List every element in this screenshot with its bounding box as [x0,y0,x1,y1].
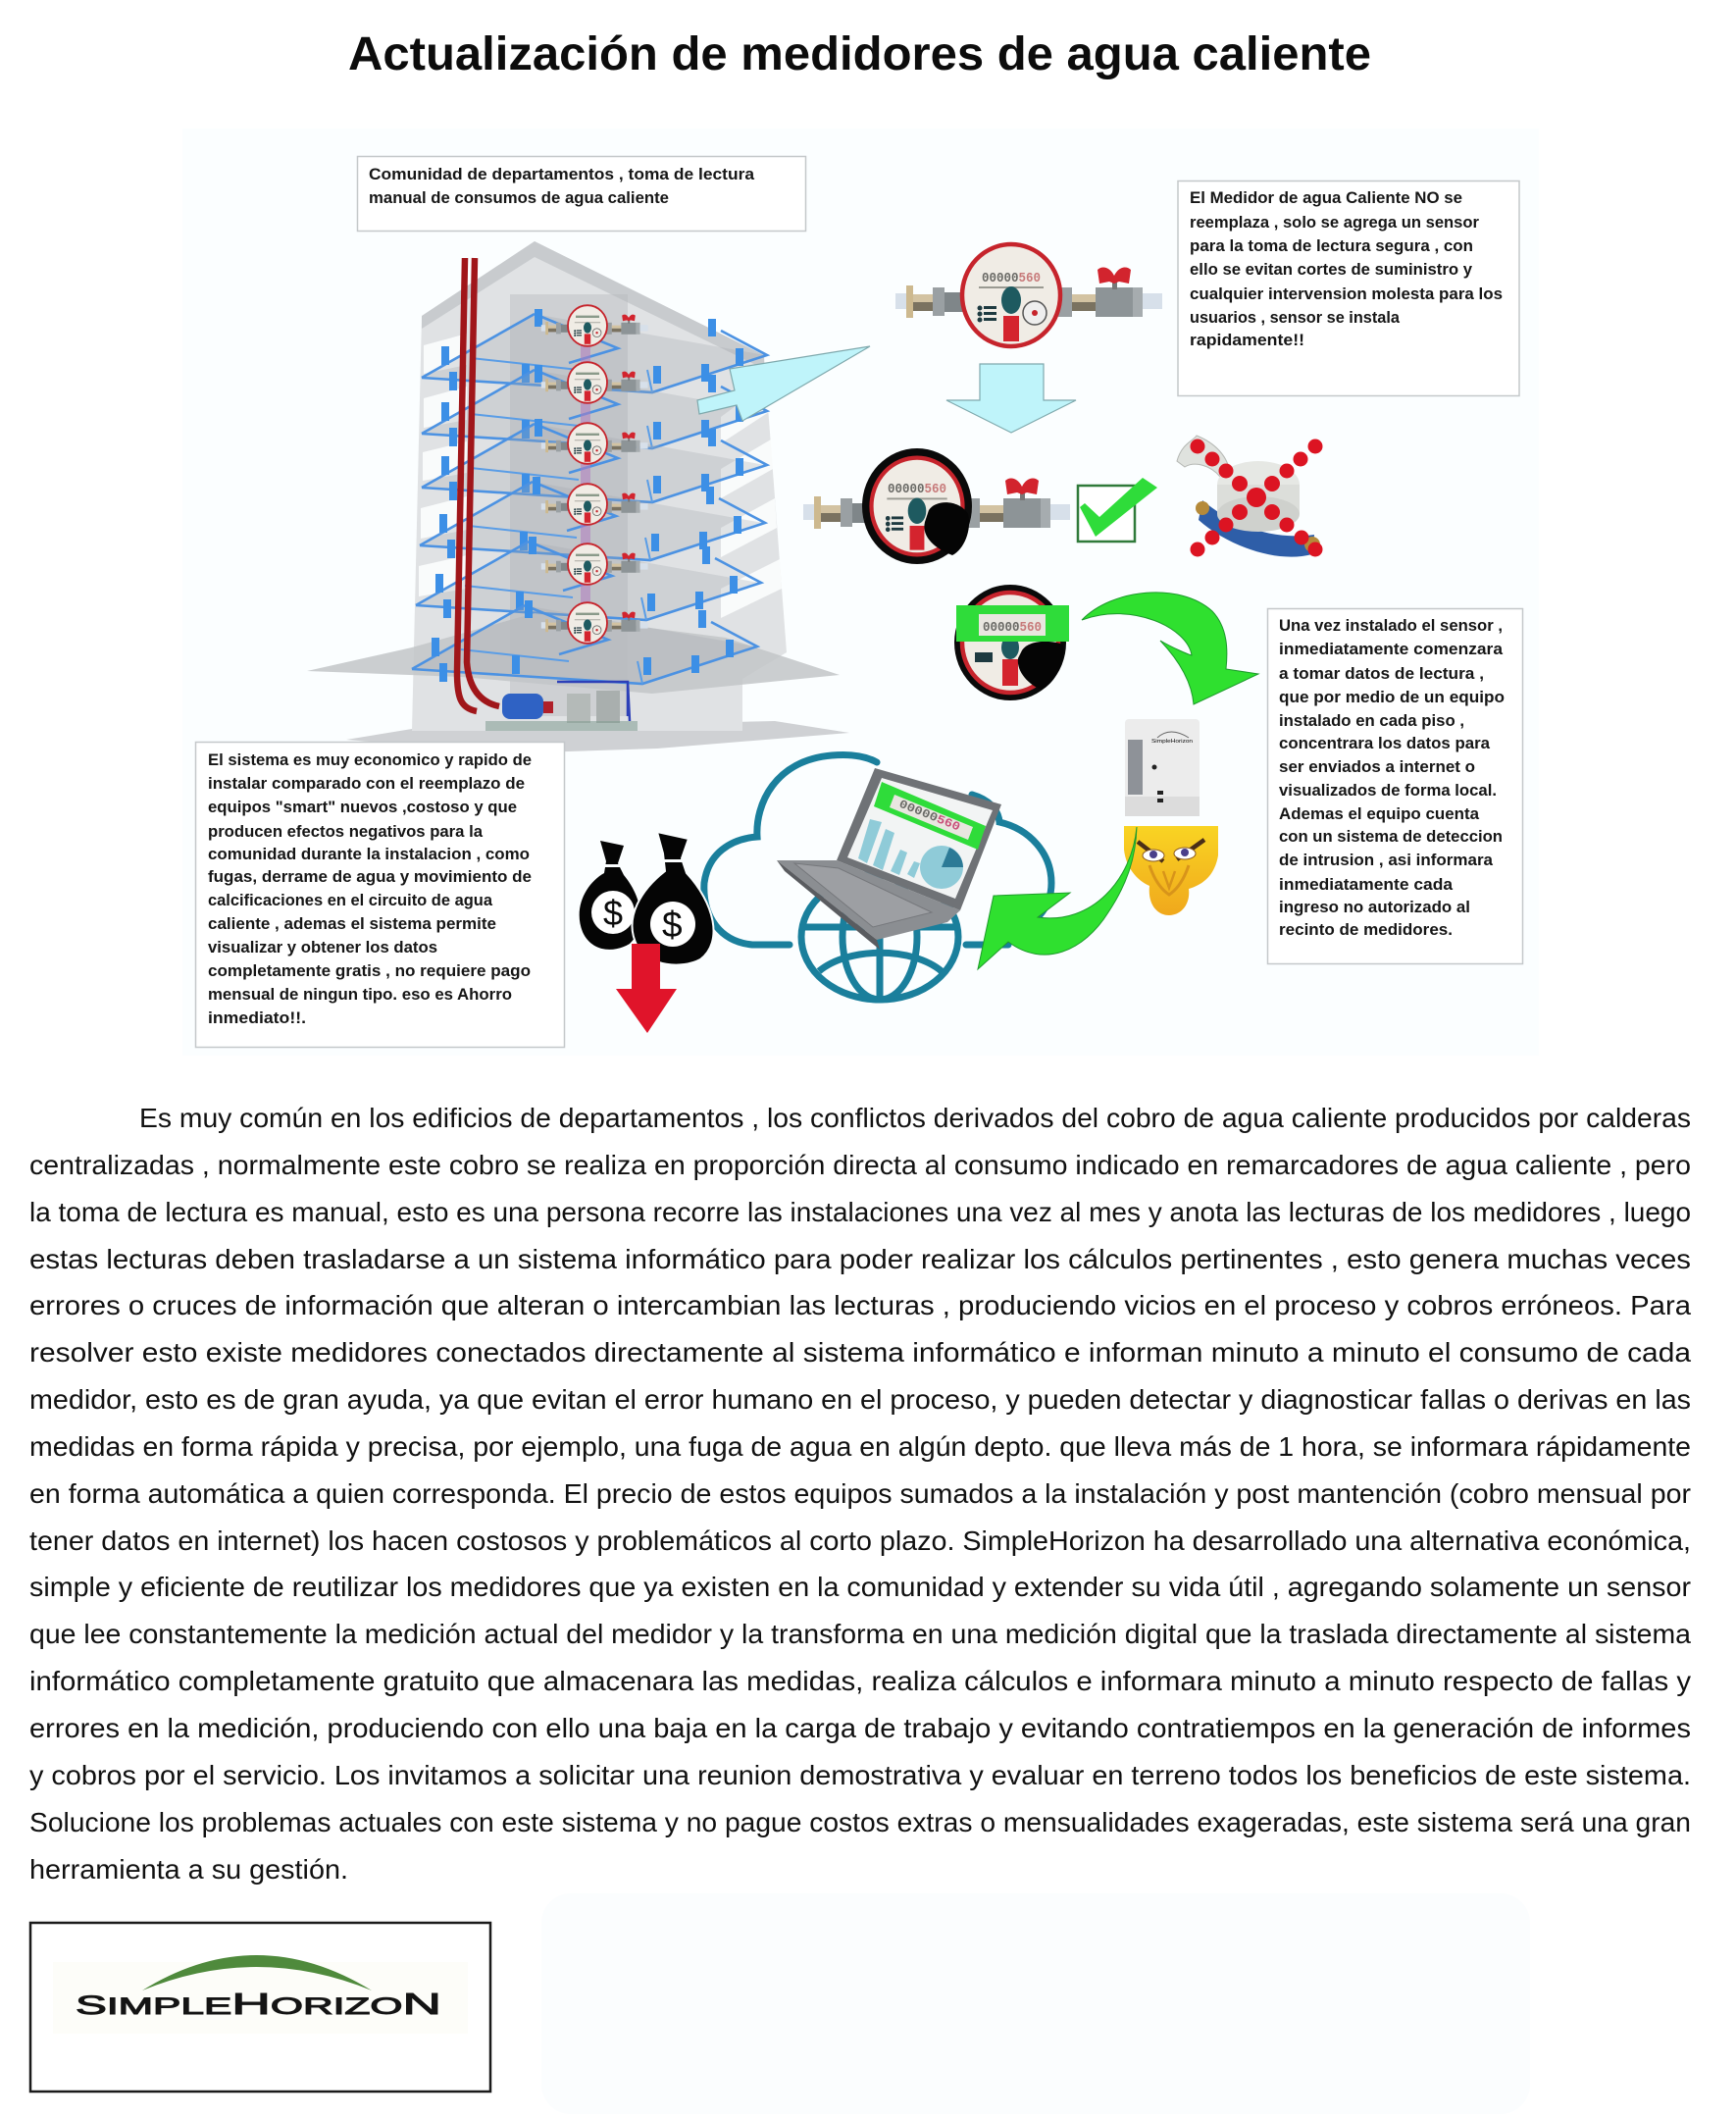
callout: sensor data: ingreso no autorizado al [1279,899,1470,916]
callout: community [357,157,806,232]
body paragraph [29,1103,1692,1885]
callout: sensor data: instalado en cada piso , [1279,712,1464,730]
callout: meter not replaced: usuarios , sensor se instala [1190,309,1401,327]
logo: SimpleHorizon: S IMPLE H ORIZO N [76,1987,441,2021]
icon: meter with sensor [803,448,1070,564]
body paragraph: medidor, esto es de gran ayuda, ya que evitan el error humano en el proceso, y pueden detectar y diagnosticar fallas o derivas en las [29,1384,1691,1415]
body paragraph: errores en la medición, produciendo con ello una baja en la carga de trabajo y evitando contratiempos en la generación de informes [29,1713,1691,1743]
callout: sensor data: con un sistema de deteccion [1279,828,1503,846]
callout: economical system: calcificaciones en el circuito de agua [208,892,493,909]
callout: sensor data: a tomar datos de lectura , [1279,665,1484,683]
icon: gateway device: SimpleHorizon [1151,739,1193,745]
icon: gateway device [1125,719,1200,816]
callout: sensor data: recinto de medidores. [1279,921,1453,939]
body paragraph: informático completamente gratuito que almacenara las medidas, realiza cálculos e informara minuto a minuto respecto de fallas y [29,1666,1691,1696]
arrow: green curved to cloud [978,827,1137,969]
callout: meter not replaced [1178,181,1519,396]
callout: meter not replaced: reemplaza , solo se agrega un sensor [1190,214,1480,232]
icon: cloud [704,754,1051,945]
icon: water meter [895,244,1162,346]
callout: economical system: comunidad durante la instalacion , como [208,846,530,863]
icon: money bags [580,832,714,965]
callout: economical system: producen efectos negativos para la [208,823,484,841]
body paragraph: tener datos en internet) los hacen costosos y problemáticos al corto plazo. SimpleHorizon ha desarrollado una alternativa económica, [29,1525,1691,1556]
callout: economical system: fugas, derrame de agua y movimiento de [208,868,532,886]
callout: sensor data: de intrusion , asi informara [1279,852,1494,869]
callout: community: manual de consumos de agua caliente [369,189,669,207]
callout: meter not replaced: cualquier intervension molesta para los [1190,285,1503,303]
window gaps [419,334,782,618]
icon: meter with sensor: 00000560 [888,482,946,497]
callout: economical system: mensual de ningun tipo. eso es Ahorro [208,986,512,1004]
icon: red hot water riser [457,258,499,711]
logo: SimpleHorizon [30,1923,490,2092]
callout: economical system [196,742,565,1048]
arrow: down [946,364,1076,433]
callout: economical system: visualizar y obtener los datos [208,939,437,956]
icon: watching emoji [1124,826,1218,915]
callout: economical system: completamente gratis , no requiere pago [208,962,531,980]
callout: sensor data: visualizados de forma local. [1279,782,1497,800]
icon: globe [801,874,958,1000]
callout: sensor data: Una vez instalado el sensor , [1279,617,1503,635]
body paragraph: herramienta a su gestión. [29,1854,348,1885]
callout: sensor data: inmediatamente comenzara [1279,641,1504,658]
arrow: cyan pointer to meter [697,346,870,421]
title: Actualización de medidores de agua caliente [348,28,1371,80]
icon: green check in box [1078,478,1157,542]
icon: meter with green digital sensor: 00000560 [983,620,1042,636]
body paragraph: simple y eficiente de reutilizar los medidores que ya existen en la comunidad y extender su vida útil , agregando solamente un sensor [29,1572,1691,1602]
callout: sensor data [1267,608,1522,963]
callout: economical system: instalar comparado con el reemplazo de [208,775,525,793]
callout: sensor data: inmediatamente cada [1279,876,1454,894]
body paragraph: errores o cruces de información que alteran o intercambian las lecturas , produciendo vicios en el proceso y cobros erróneos. Para [29,1290,1692,1320]
body paragraph: la toma de lectura es manual, esto es una persona recorre las instalaciones una vez al mes y anota las lecturas de los medidores , luego [29,1197,1691,1227]
red dotted X [1191,439,1322,557]
arrow: red cost down [616,944,677,1033]
building illustration [307,241,849,753]
callout: economical system: El sistema es muy economico y rapido de [208,751,532,769]
callout: community: Comunidad de departamentos , toma de lectura [369,166,755,183]
body paragraph: en forma automática a quien corresponda. El precio de estos equipos sumados a la instalación y post mantención (cobro mensual por [29,1478,1691,1509]
body paragraph: estas lecturas deben trasladarse a un sistema informático para poder realizar los cálculos pertinentes , esto genera muchas veces [29,1244,1691,1274]
icon: crossed old meter [1177,436,1322,557]
callout: sensor data: ser enviados a internet o [1279,758,1475,776]
body paragraph: que lee constantemente la medición actual del medidor y la transforma en una medición digital que la traslada directamente al sistema [29,1619,1692,1649]
icon: laptop with dashboard [777,768,1001,950]
callout: meter not replaced: ello se evitan cortes de suministro y [1190,261,1473,279]
callout: meter not replaced: para la toma de lectura segura , con [1190,237,1473,255]
floor slabs and blue pipes [307,309,840,694]
callout: economical system: inmediato!!. [208,1009,306,1027]
pie chart on screen [920,846,963,889]
faint background patch [541,1893,1530,2114]
body paragraph: y cobros por el servicio. Los invitamos a solicitar una reunion demostrativa y evaluar en terreno todos los beneficios de este sistema. [29,1760,1691,1790]
icon: money bags: $ [662,904,683,945]
body paragraph: Es muy común en los edificios de departamentos , los conflictos derivados del cobro de agua caliente producidos por calderas [139,1103,1691,1133]
callout: meter not replaced: El Medidor de agua Caliente NO se [1190,189,1462,207]
callout: sensor data: que por medio de un equipo [1279,689,1505,706]
callout: economical system: caliente , ademas el sistema permite [208,915,496,933]
body paragraph: Solucione los problemas actuales con este sistema y no pague costos extras o mensualidades exageradas, este sistema será una gran [29,1807,1691,1837]
arrow: green curved to gateway [1082,593,1258,704]
icon: money bags: $ [603,893,623,933]
callout: sensor data: concentrara los datos para [1279,735,1491,752]
icon: laptop with dashboard: 00000560 [897,798,962,834]
body paragraph: centralizadas , normalmente este cobro se realiza en proporción directa al consumo indicado en remarcadores de agua caliente , pero [29,1150,1691,1180]
body paragraph: resolver esto existe medidores conectados directamente al sistema informático e informan minuto a minuto el consumo de cada [29,1337,1692,1368]
panel: diagram [182,129,1539,1056]
bar chart on screen [858,819,920,878]
body paragraph: medidas en forma rápida y precisa, por ejemplo, una fuga de agua en algún depto. que lleva más de 1 hora, se informara rápidamente [29,1431,1691,1462]
boiler room equipment [485,682,638,731]
icon: water meter: 00000560 [982,271,1041,286]
small meters on floors [541,305,648,644]
icon: meter with green digital sensor [954,585,1069,700]
callout: sensor data: Ademas el equipo cuenta [1279,805,1480,823]
callout: meter not replaced: rapidamente!! [1190,332,1304,349]
callout: economical system: equipos "smart" nuevos ,costoso y que [208,799,517,816]
